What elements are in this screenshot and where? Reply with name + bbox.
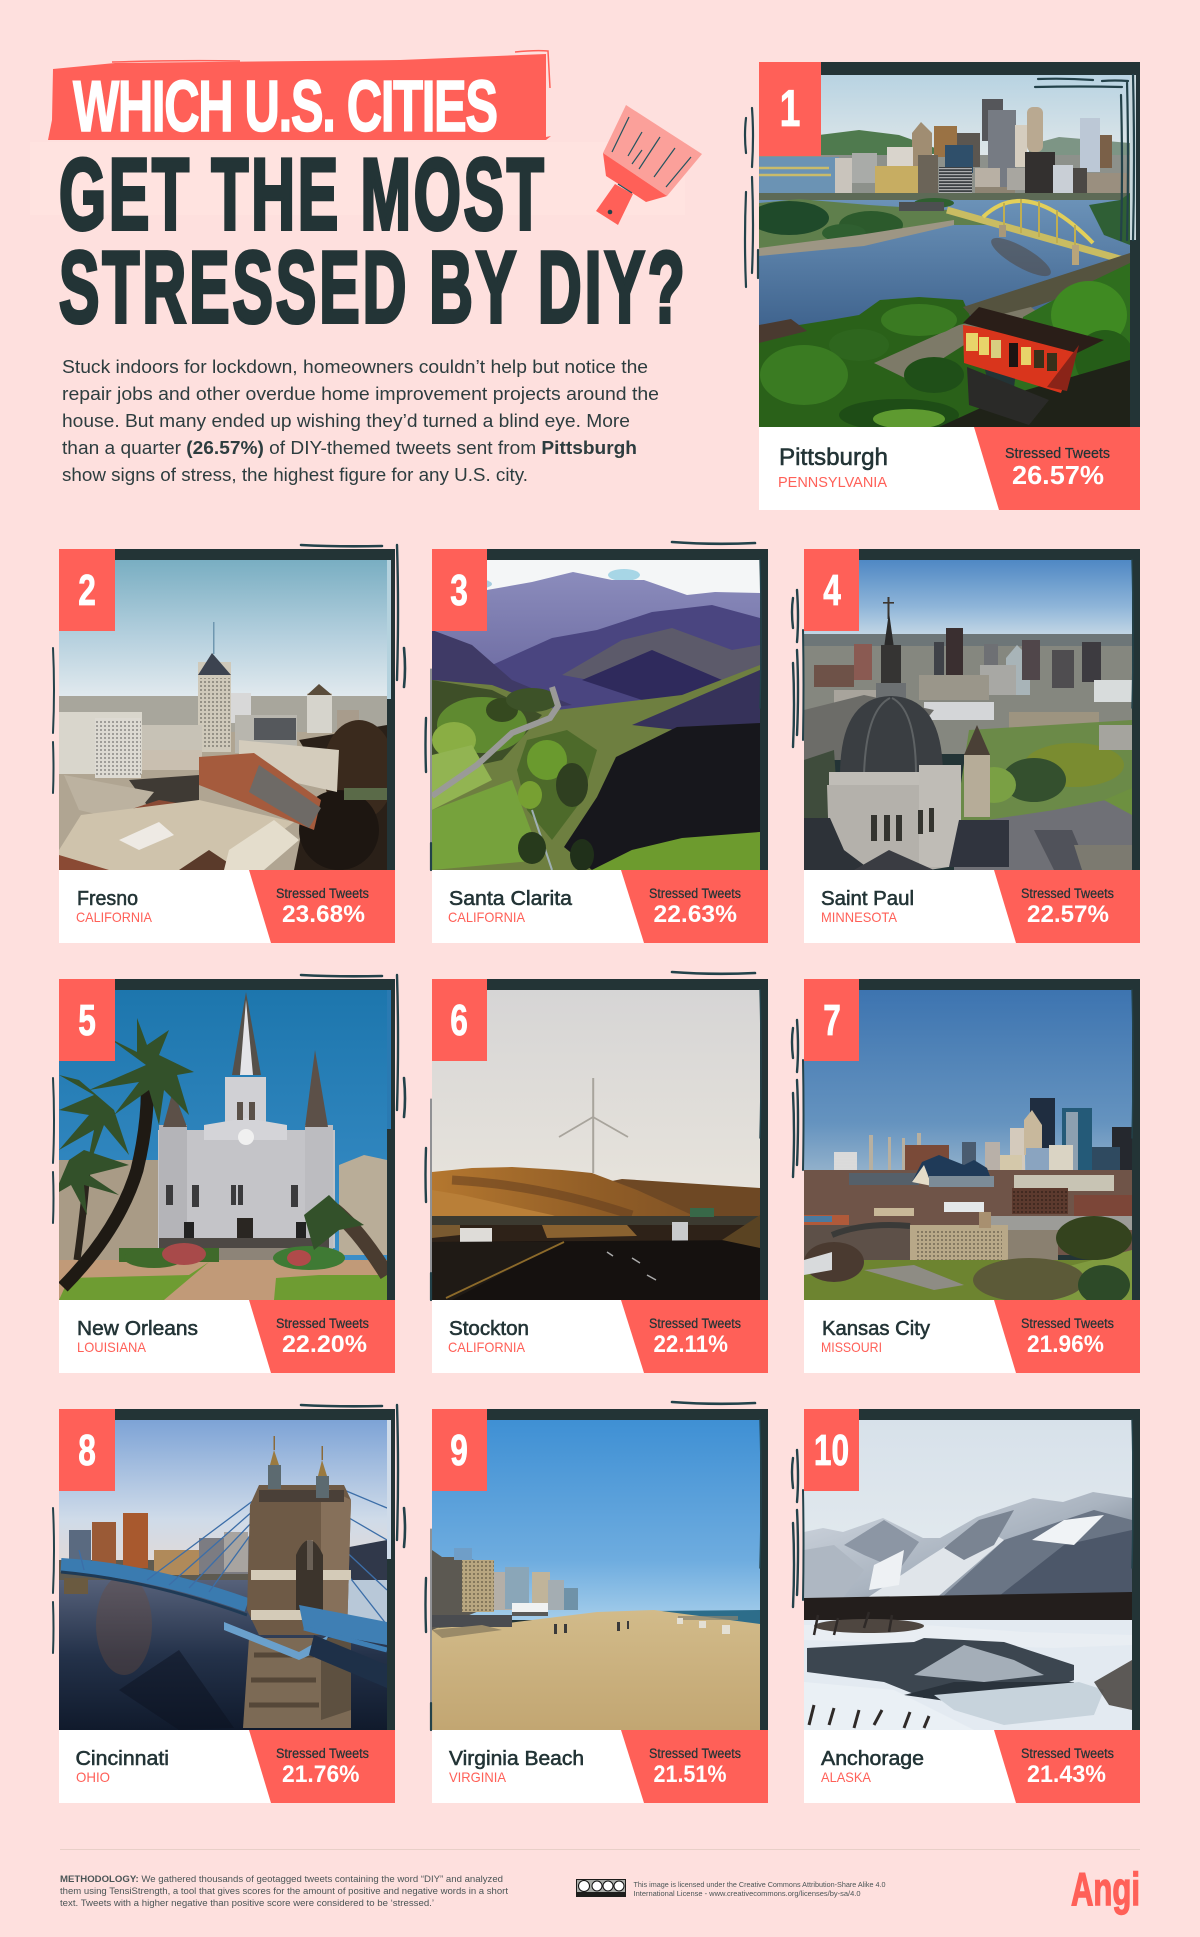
- stat value: 22.20%: [282, 1331, 367, 1358]
- photo: Virginia Beach: [432, 1420, 760, 1730]
- icon: creative commons badge: [576, 1879, 626, 1897]
- state name: CALIFORNIA: [448, 909, 526, 925]
- footer: red stat panel: [974, 427, 1140, 510]
- state name: CALIFORNIA: [448, 1339, 526, 1355]
- rank badge: [59, 979, 115, 1061]
- stat value: 21.43%: [1027, 1761, 1106, 1788]
- methodology text: METHODOLOGY: We gathered thousands of geotagged tweets containing the word “DIY” and analyzed: [60, 1874, 503, 1885]
- photo right sliver: [387, 560, 391, 699]
- methodology text: [60, 1874, 508, 1909]
- city name: Santa Clarita: [449, 888, 573, 910]
- footer: white label: [432, 870, 768, 943]
- rank badge: [432, 1409, 487, 1491]
- stat label: Stressed Tweets: [649, 1746, 741, 1761]
- state name: ALASKA: [821, 1769, 872, 1785]
- footer: red stat panel: [994, 1300, 1140, 1373]
- footer: red stat panel: [249, 1300, 395, 1373]
- photo: Saint Paul cathedral: [804, 560, 1132, 870]
- card 9: Virginia Beach: [426, 1402, 768, 1803]
- brush strokes: [426, 1402, 761, 1730]
- rank badge: [759, 62, 821, 156]
- stat label: Stressed Tweets: [1005, 445, 1110, 462]
- stat label: Stressed Tweets: [649, 886, 741, 901]
- rank number: 9: [450, 1426, 468, 1475]
- intro text block: repair jobs and other overdue home improvement projects around the: [62, 384, 659, 404]
- intro text block: [62, 357, 659, 485]
- footer: white label: [59, 870, 395, 943]
- brush strokes: [792, 1420, 1133, 1607]
- halftone band behind heading: [30, 142, 685, 215]
- city name: Stockton: [449, 1318, 529, 1340]
- city name: Anchorage: [821, 1748, 924, 1770]
- stat label: Stressed Tweets: [649, 1316, 741, 1331]
- footer: red stat panel: [994, 870, 1140, 943]
- stat value: 21.51%: [654, 1761, 726, 1788]
- footer: white label: [759, 427, 1140, 510]
- state name: LOUISIANA: [77, 1339, 147, 1355]
- stat value: 22.11%: [654, 1331, 728, 1358]
- rank number: 7: [823, 996, 841, 1045]
- main heading: [59, 138, 685, 344]
- photo right sliver: [1130, 75, 1136, 240]
- rank badge: [804, 979, 859, 1061]
- main heading: GET THE MOST: [59, 138, 544, 251]
- rank badge: [804, 549, 859, 631]
- intro text block: house. But many ended up wishing they’d turned a blind eye. More: [62, 411, 630, 431]
- stat value: 21.76%: [282, 1761, 360, 1788]
- card 5: New Orleans: [53, 975, 405, 1373]
- icon: paint brush: [596, 105, 702, 225]
- card 1: Pittsburgh: [745, 62, 1140, 510]
- stat value: 21.96%: [1027, 1331, 1104, 1358]
- intro text block: show signs of stress, the highest figure for any U.S. city.: [62, 465, 528, 485]
- city name: Virginia Beach: [449, 1748, 584, 1770]
- card 10: Anchorage: [792, 1409, 1140, 1803]
- footer: white label: [804, 1300, 1140, 1373]
- brush strokes: [792, 990, 1133, 1177]
- stat label: Stressed Tweets: [276, 1316, 369, 1331]
- card 7: Kansas City: [792, 979, 1140, 1373]
- rank badge: [804, 1409, 859, 1491]
- stat label: Stressed Tweets: [1021, 1316, 1114, 1331]
- city name: Fresno: [77, 888, 138, 910]
- rank badge: [432, 979, 487, 1061]
- rank badge: [59, 549, 115, 631]
- rank number: 1: [780, 79, 800, 137]
- logo: Angi: Angi: [1071, 1863, 1140, 1915]
- stat value: 22.63%: [654, 901, 737, 928]
- stat label: Stressed Tweets: [1021, 1746, 1114, 1761]
- brush strokes: [745, 75, 1134, 287]
- card 8: Cincinnati: [53, 1405, 405, 1803]
- rank number: 8: [78, 1426, 96, 1475]
- footer: red stat panel: [249, 870, 395, 943]
- license text: This image is licensed under the Creative Commons Attribution-Share Alike 4.0: [634, 1880, 886, 1889]
- brush strokes: [53, 545, 405, 793]
- rank badge: [59, 1409, 115, 1491]
- methodology text: text. Tweets with a higher negative than positive score were considered to be ‘stressed.’: [60, 1898, 434, 1909]
- footer: red stat panel: [621, 1300, 768, 1373]
- footer: white label: [59, 1730, 395, 1803]
- intro text block: Stuck indoors for lockdown, homeowners couldn’t help but notice the: [62, 357, 648, 377]
- stat label: Stressed Tweets: [276, 886, 369, 901]
- footer: white label: [59, 1300, 395, 1373]
- city name: New Orleans: [77, 1318, 198, 1340]
- photo right sliver: [387, 1420, 391, 1559]
- city name: Saint Paul: [821, 888, 914, 910]
- methodology text: them using TensiStrength, a tool that gives scores for the amount of positive and negative words in a short: [60, 1886, 508, 1897]
- footer: white label: [804, 1730, 1140, 1803]
- intro text block: than a quarter (26.57%) of DIY-themed tweets sent from Pittsburgh: [62, 438, 637, 458]
- rank number: 3: [450, 566, 468, 615]
- license text: International License - www.creativecommons.org/licenses/by-sa/4.0: [634, 1889, 860, 1898]
- footer: red stat panel: [621, 870, 768, 943]
- card 6: Stockton: [426, 972, 768, 1373]
- card 4: Saint Paul: [792, 549, 1140, 943]
- footer: white label: [804, 870, 1140, 943]
- photo: New Orleans cathedral: [59, 990, 387, 1300]
- stat value: 23.68%: [282, 901, 365, 928]
- state name: VIRGINIA: [449, 1769, 507, 1785]
- brush strokes: [53, 975, 405, 1223]
- photo: Pittsburgh skyline: [759, 75, 1130, 427]
- license text: [634, 1880, 886, 1898]
- rank badge: [432, 549, 487, 631]
- city name: Kansas City: [822, 1318, 930, 1340]
- rank number: 5: [78, 996, 96, 1045]
- photo: Stockton highway and turbine: [432, 990, 760, 1300]
- state name: MINNESOTA: [821, 909, 898, 925]
- state name: PENNSYLVANIA: [778, 474, 887, 491]
- brush strokes: [426, 972, 761, 1300]
- photo right sliver: [387, 990, 391, 1129]
- footer: white label: [432, 1300, 768, 1373]
- footer: red stat panel: [994, 1730, 1140, 1803]
- state name: CALIFORNIA: [76, 909, 153, 925]
- photo: Kansas City skyline: [804, 990, 1132, 1300]
- stat value: 26.57%: [1012, 460, 1104, 490]
- rank number: 6: [450, 996, 468, 1045]
- brush strokes: [426, 542, 761, 870]
- footer: red stat panel: [621, 1730, 768, 1803]
- rank number: 2: [78, 566, 96, 615]
- photo: Fresno downtown: [59, 560, 387, 870]
- footer: red stat panel: [249, 1730, 395, 1803]
- rank number: 4: [823, 566, 841, 615]
- brush strokes: [53, 1405, 405, 1653]
- stat label: Stressed Tweets: [1021, 886, 1114, 901]
- state name: MISSOURI: [821, 1339, 882, 1355]
- photo: Cincinnati Roebling bridge: [59, 1420, 387, 1730]
- stat value: 22.57%: [1027, 901, 1109, 928]
- main heading: STRESSED BY DIY?: [59, 231, 685, 344]
- brush strokes: [792, 560, 1133, 747]
- photo: Santa Clarita valley: [432, 560, 760, 870]
- stat label: Stressed Tweets: [276, 1746, 369, 1761]
- rank number: 10: [814, 1426, 849, 1475]
- state name: OHIO: [76, 1769, 110, 1785]
- photo: Anchorage snowy mountains: [804, 1420, 1132, 1730]
- city name: Pittsburgh: [779, 444, 888, 471]
- title line 1: WHICH U.S. CITIES: [73, 67, 498, 147]
- card 3: Santa Clarita: [426, 542, 768, 943]
- title banner: [48, 51, 551, 147]
- footer: white label: [432, 1730, 768, 1803]
- city name: Cincinnati: [76, 1748, 169, 1770]
- card 2: Fresno: [53, 545, 405, 943]
